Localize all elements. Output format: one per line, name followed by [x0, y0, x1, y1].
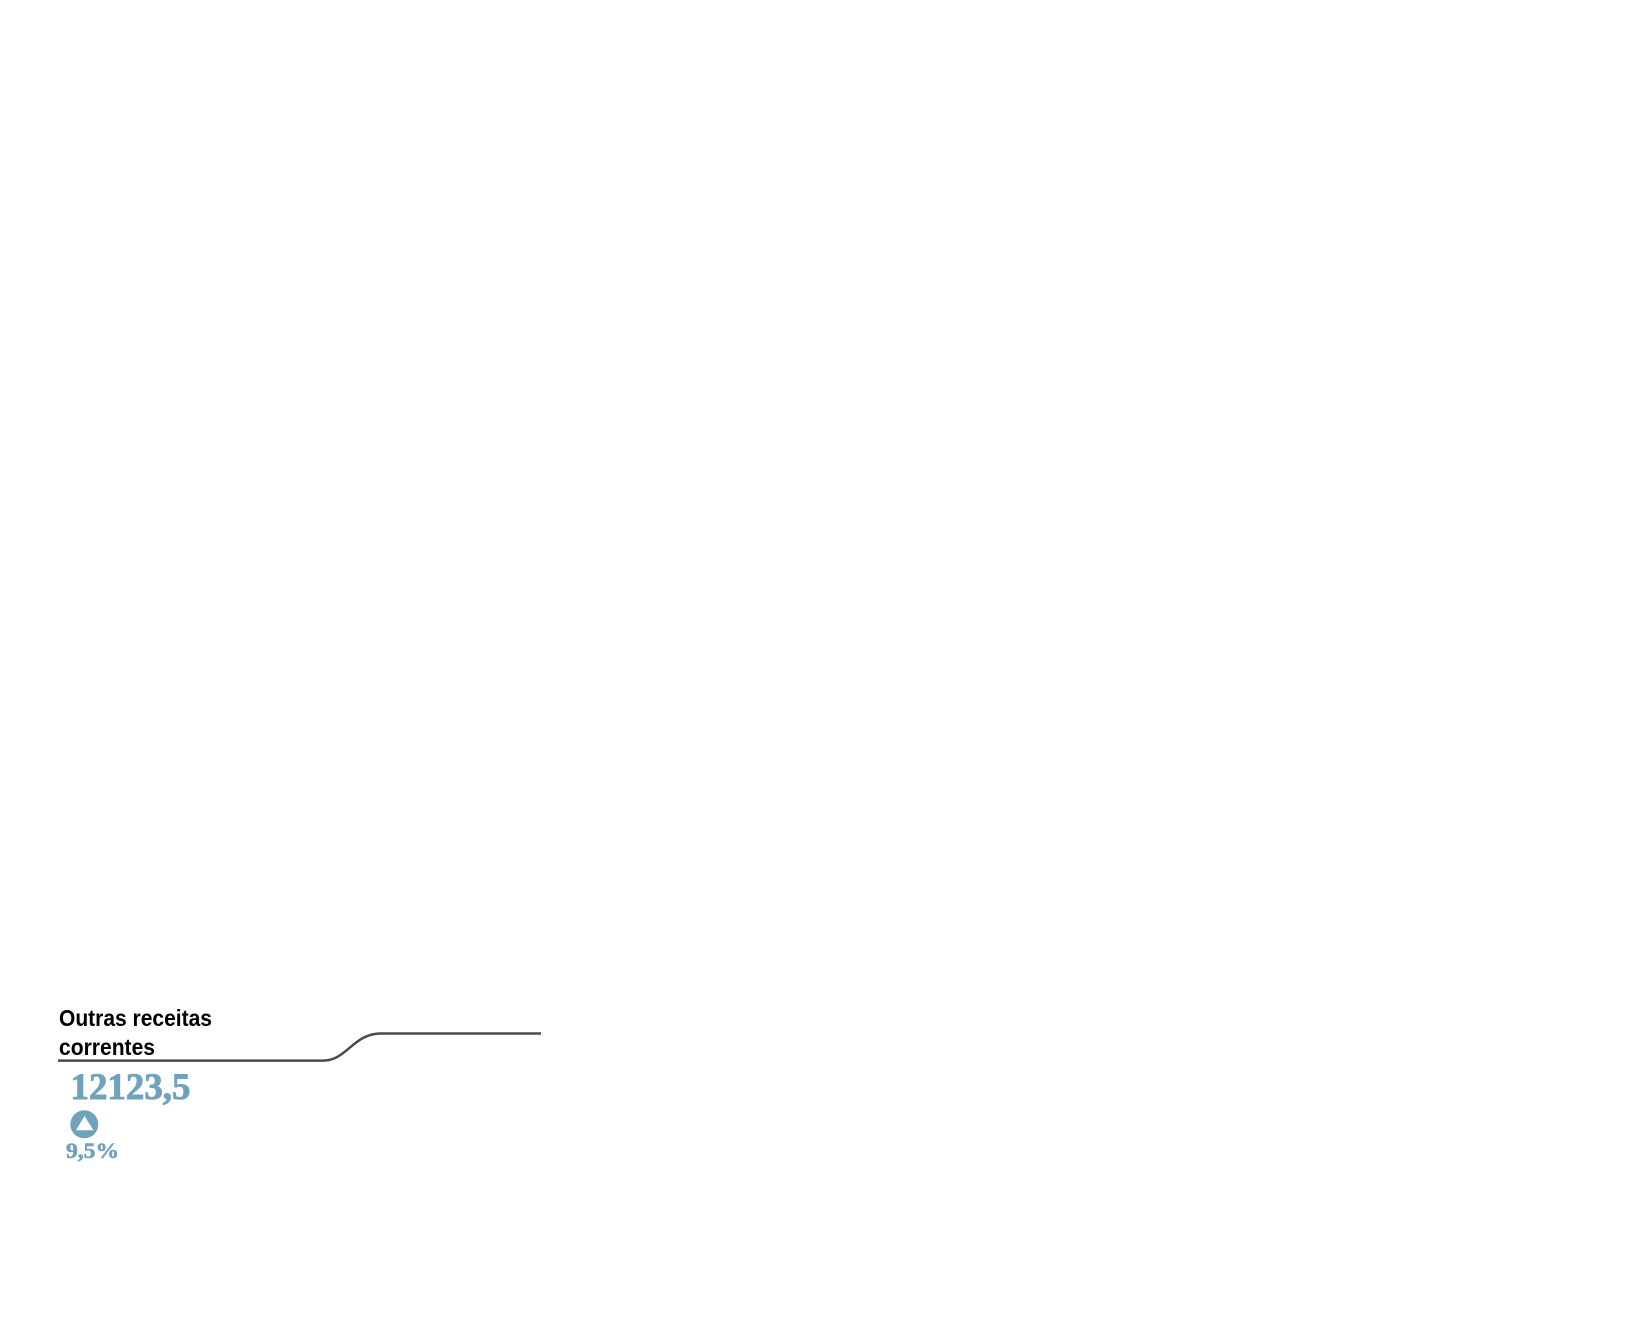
icon: up triangle: [70, 1110, 98, 1138]
line chart: [58, 1034, 541, 1061]
heading: Outras receitas: [59, 1005, 212, 1031]
heading: correntes: [59, 1034, 155, 1060]
percentage change: 9,5%: [66, 1138, 119, 1163]
value: 12123,5: [70, 1067, 190, 1108]
panel: outras receitas correntes: [58, 1005, 541, 1163]
